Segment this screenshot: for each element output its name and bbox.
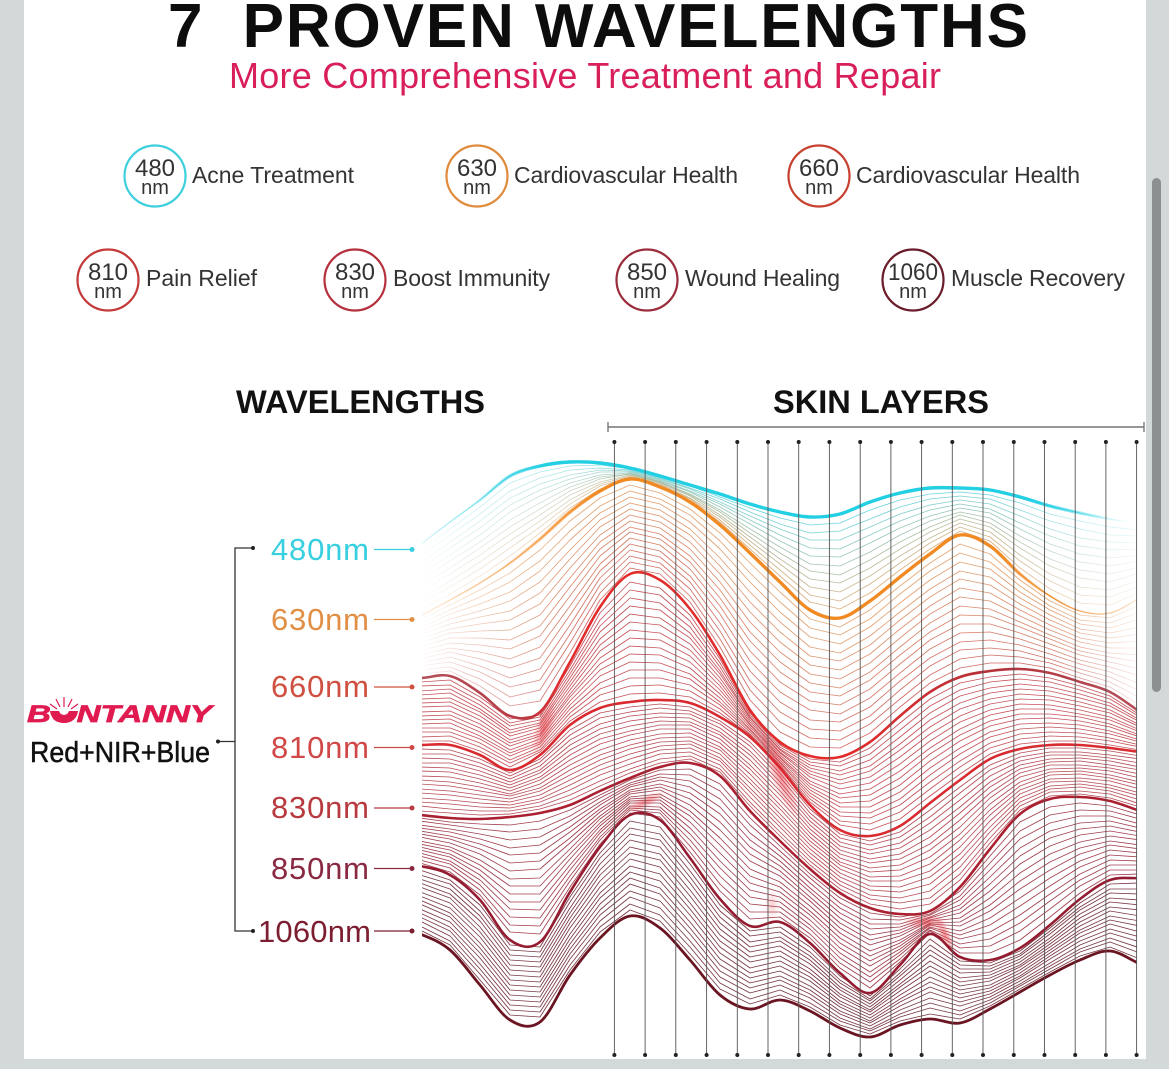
curve: 810nm [420,700,1140,836]
badge: 810 nm pain relief: 810 [88,259,128,286]
badge: 660 nm cardiovascular health: Cardiovascular Health [856,162,1080,188]
badge: 830 nm boost immunity: Boost Immunity [393,265,550,291]
fine lines: 480nm to 630nm [420,465,1140,610]
bracket connecting wavelengths [216,546,255,933]
red glow highlights where lines converge [526,697,959,956]
brand logo: BONTANNY [27,701,215,728]
fine lines: 830nm to 850nm [420,769,1140,988]
heading: skin layers: SKIN LAYERS [773,384,989,420]
badge: 630 nm cardiovascular health: Cardiovascular Health [514,162,738,188]
skin layers range bracket [608,422,1144,432]
subtitle: More Comprehensive Treatment and Repair [229,55,941,96]
curve: 660nm [420,572,1140,758]
badge: 1060 nm muscle recovery: nm [899,281,927,303]
wavelength labels with pointers [258,532,414,949]
badge: 1060 nm muscle recovery [882,250,1126,310]
badge: 480 nm acne treatment [124,146,355,206]
badge: 810 nm pain relief: Pain Relief [146,265,258,291]
wave chart: wavelength penetration through skin layers [420,462,1140,1037]
badge: 660 nm cardiovascular health [788,146,1080,206]
heading: wavelengths: WAVELENGTHS [236,384,485,420]
curve: 850nm [420,813,1140,993]
curve: 830nm [420,763,1140,914]
label: 660nm [271,669,414,704]
skin layer vertical markers [614,442,1137,1055]
badge: 830 nm boost immunity: nm [341,281,369,303]
label: 1060nm: 1060nm [258,914,371,949]
badge: 480 nm acne treatment: 480 [135,155,175,182]
label: 660nm: 660nm [271,669,369,704]
legend: seven wavelength benefits [78,146,1126,310]
label: 480nm [271,532,414,567]
label: 850nm [271,851,414,886]
badge: 850 nm wound healing: Wound Healing [685,265,840,291]
label: 810nm [271,730,414,765]
fine lines: 850nm to 1060nm [420,821,1140,1034]
badge: 810 nm pain relief: nm [94,281,122,303]
label: 830nm: 830nm [271,790,369,825]
scrollbar thumb [1152,178,1161,692]
label: 830nm [271,790,414,825]
badge: 630 nm cardiovascular health [446,146,738,206]
label: 630nm [271,602,414,637]
badge: 1060 nm muscle recovery: 1060 [888,259,938,286]
brand tagline: Red+NIR+Blue [30,737,210,769]
badge: 850 nm wound healing: 850 [627,259,667,286]
badge: 850 nm wound healing: nm [633,281,661,303]
badge: 660 nm cardiovascular health: nm [805,177,833,199]
badge: 660 nm cardiovascular health: 660 [799,155,839,182]
curve: 480nm [420,462,1140,545]
label: 810nm: 810nm [271,730,369,765]
fine lines: 810nm to 830nm [420,704,1140,909]
badge: 630 nm cardiovascular health: 630 [457,155,497,182]
badge: 830 nm boost immunity: 830 [335,259,375,286]
badge: 850 nm wound healing [616,250,840,310]
curve: 630nm [420,479,1140,618]
curve: 1060nm [420,916,1140,1037]
label: 630nm: 630nm [271,602,369,637]
badge: 480 nm acne treatment: nm [141,177,169,199]
label: 480nm: 480nm [271,532,369,567]
fine lines: 630nm to 660nm [420,485,1140,748]
label: 850nm: 850nm [271,851,369,886]
badge: 1060 nm muscle recovery: Muscle Recovery [951,265,1126,291]
badge: 830 nm boost immunity [324,250,550,310]
badge: 810 nm pain relief [78,250,258,310]
fine lines: 660nm to 810nm [420,582,1140,830]
badge: 480 nm acne treatment: Acne Treatment [192,162,355,188]
badge: 630 nm cardiovascular health: nm [463,177,491,199]
brand logo [27,697,215,728]
